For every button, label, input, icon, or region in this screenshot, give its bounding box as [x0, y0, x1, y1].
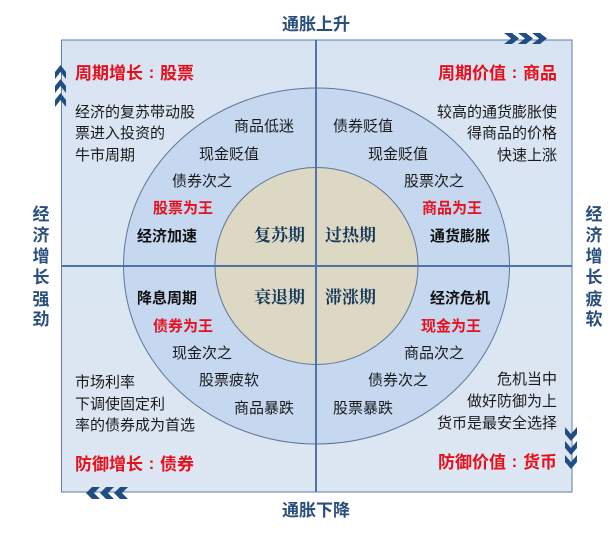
heading: top axis: 通胀上升 [282, 15, 350, 34]
vertical axis [315, 40, 317, 492]
heading: cycle growth: 股票 [160, 64, 194, 83]
heading: defensive value: : [512, 452, 517, 471]
label: recovery: 复苏期 [254, 225, 305, 245]
heading: defensive growth: 债券 [160, 454, 194, 474]
icon: chevrons left [86, 487, 128, 499]
label: cash: 现金贬值 [199, 146, 259, 163]
label: phase: 降息周期 [137, 289, 197, 307]
label: cash: 现金为王 [421, 317, 481, 335]
panel: top-right quadrant text [325, 63, 557, 245]
icon: chevrons right [504, 33, 547, 44]
heading: left axis: 经 [32, 205, 50, 224]
outer ring [124, 88, 510, 444]
text block: recovery description: 经济的复苏带动股 [75, 103, 195, 121]
heading: right axis: 济 [586, 225, 602, 245]
heading: cycle value: 商品 [523, 64, 557, 83]
label: bonds: 债券贬值 [333, 118, 393, 135]
text block: inflation description: 快速上涨 [497, 147, 557, 164]
heading: bottom axis: 通胀下降 [282, 501, 350, 520]
heading: cycle growth: : [149, 63, 154, 82]
heading: left axis: 强 [32, 290, 50, 309]
label: bonds: 债券为王 [153, 317, 213, 335]
label: overheating: 过热期 [325, 225, 376, 245]
heading: defensive growth: : [149, 454, 154, 473]
text block: inflation description: 得商品的价格 [467, 125, 557, 142]
text block: recovery description [75, 103, 195, 164]
text block: crisis description: 货币是最安全选择 [437, 414, 557, 432]
panel: bottom-left quadrant text [75, 288, 305, 474]
label: phase: 经济加速 [137, 227, 197, 245]
heading: right axis: 经 [586, 205, 602, 224]
label: stocks: 股票次之 [404, 173, 464, 190]
heading: right axis [586, 205, 602, 329]
label: recession: 衰退期 [254, 288, 305, 307]
icon: chevrons up [55, 65, 66, 107]
text block: crisis description: 做好防御为上 [467, 393, 557, 410]
text block: recovery description: 票进入投资的 [75, 125, 165, 142]
heading: right axis: 疲 [586, 289, 602, 309]
label: stagflation: 滞涨期 [325, 288, 376, 307]
heading: left axis: 劲 [32, 310, 50, 329]
heading: defensive value: 防御价值 [438, 453, 506, 472]
heading: defensive value: 货币 [523, 452, 557, 472]
text block: inflation description [437, 103, 557, 164]
label: bonds: 债券次之 [172, 173, 232, 190]
text block: rates description: 率的债券成为首选 [75, 417, 195, 434]
heading: defensive growth: 防御增长 [75, 455, 143, 474]
panel: quadrant background [62, 40, 572, 492]
heading: cycle value: : [512, 63, 517, 82]
label: commodities: 商品为王 [422, 199, 482, 217]
heading: left axis [32, 205, 50, 329]
text block: inflation description: 较高的通货膨胀使 [437, 103, 557, 121]
text block: rates description: 市场利率 [75, 374, 135, 391]
icon: chevrons down [565, 427, 577, 469]
label: stocks: 股票暴跌 [333, 400, 393, 417]
label: commodities: 商品低迷 [234, 118, 294, 135]
panel: bottom-right quadrant text [325, 288, 557, 472]
label: cash: 现金贬值 [368, 146, 428, 163]
label: phase: 通货膨胀 [430, 227, 490, 245]
inner circle [215, 168, 418, 364]
horizontal axis [62, 265, 572, 267]
heading: left axis: 长 [32, 268, 50, 287]
heading: right axis: 长 [586, 268, 602, 287]
text block: rates description [75, 374, 195, 434]
label: phase: 经济危机 [430, 289, 490, 307]
heading: left axis: 增 [32, 247, 50, 266]
heading: right axis: 增 [586, 247, 602, 266]
panel: top-left quadrant text [75, 63, 305, 245]
text block: recovery description: 牛市周期 [75, 147, 135, 164]
text block: crisis description [437, 371, 557, 432]
label: stocks: 股票为王 [153, 200, 213, 217]
text block: crisis description: 危机当中 [497, 371, 557, 388]
text block: rates description: 下调使固定利 [75, 396, 165, 413]
label: bonds: 债券次之 [368, 372, 428, 389]
label: stocks: 股票疲软 [199, 372, 259, 389]
heading: cycle growth: 周期增长 [75, 64, 143, 83]
label: commodities: 商品暴跌 [234, 400, 294, 417]
heading: cycle value: 周期价值 [438, 64, 506, 83]
heading: left axis: 济 [32, 225, 50, 245]
label: cash: 现金次之 [172, 345, 232, 362]
label: commodities: 商品次之 [404, 345, 464, 362]
heading: right axis: 软 [586, 310, 602, 329]
